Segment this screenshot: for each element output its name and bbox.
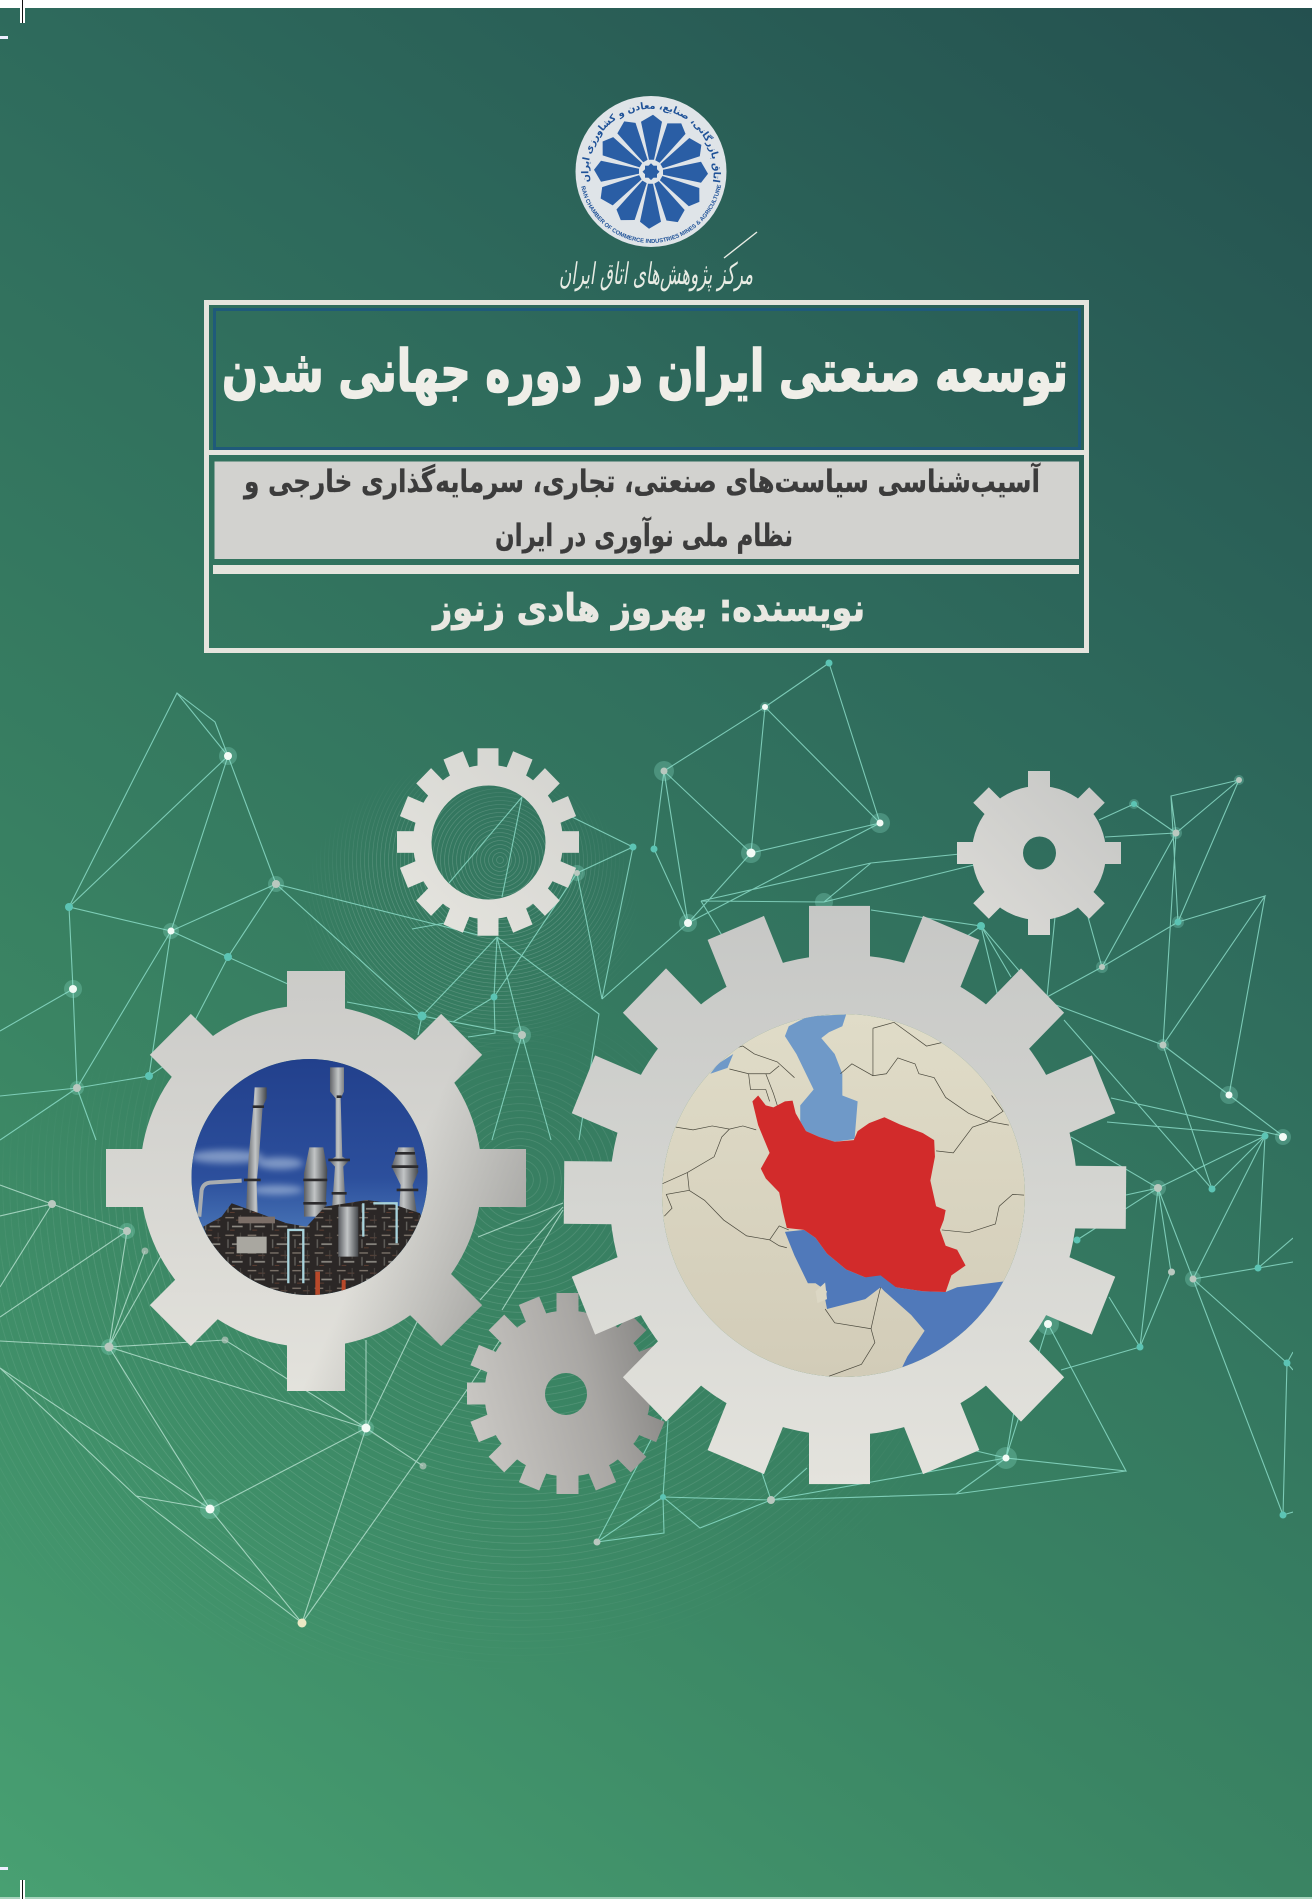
gear: top right gear xyxy=(957,771,1121,935)
frame divider under title xyxy=(209,450,1084,455)
wave line texture lower left xyxy=(0,1047,879,1634)
logo English ring text: IRAN CHAMBER OF COMMERCE INDUSTRIES MINES & AGRICULTURE xyxy=(581,184,722,243)
refinery base structure xyxy=(203,1200,427,1295)
refinery pipe xyxy=(199,1181,242,1217)
network nodes xyxy=(48,660,1291,1628)
Persian Gulf and Sea of Oman xyxy=(785,1230,1004,1368)
Qatar peninsula xyxy=(816,1283,827,1303)
divider bar xyxy=(213,565,1079,574)
subtitle line 2: نظام ملی نوآوری در ایران xyxy=(495,516,793,554)
gear: grey gear behind big gear xyxy=(467,1293,664,1494)
country borders xyxy=(662,1022,1024,1376)
blue inner title border xyxy=(214,310,1080,448)
Iran in red xyxy=(752,1095,966,1292)
subtitle panel xyxy=(214,462,1079,559)
gear: big gear xyxy=(564,906,1126,1484)
gear: left gear xyxy=(106,971,526,1391)
logo caption xyxy=(559,232,757,292)
gear: top small gear with open ring xyxy=(397,748,579,936)
logo pinwheel blades xyxy=(594,115,708,229)
photo of oil refinery inside left gear xyxy=(190,1058,430,1298)
logo: Iran Chamber of Commerce seal xyxy=(576,96,726,247)
logo Persian ring text: اتاق بازرگانی، صنایع، معادن و کشاورزی ایران xyxy=(581,102,721,182)
clouds xyxy=(190,1150,303,1195)
network of connected lines and nodes xyxy=(0,660,1293,1628)
Black Sea corner xyxy=(710,1054,733,1074)
tower bands xyxy=(244,1097,418,1203)
refinery towers xyxy=(246,1067,418,1223)
Caspian Sea xyxy=(785,1014,858,1142)
wave line texture behind top gear xyxy=(314,775,626,1046)
map of Iran and region inside big gear xyxy=(660,1010,1030,1380)
author: نویسنده: بهروز هادی زنوز xyxy=(431,586,865,631)
subtitle line 1: آسیب‌شناسی سیاست‌های صنعتی، تجاری، سرمایه‌گذاری خارجی و xyxy=(242,462,1041,500)
title frame xyxy=(206,302,1086,650)
logo caption: مرکز پژوهش‌های اتاق ایران xyxy=(559,257,753,292)
